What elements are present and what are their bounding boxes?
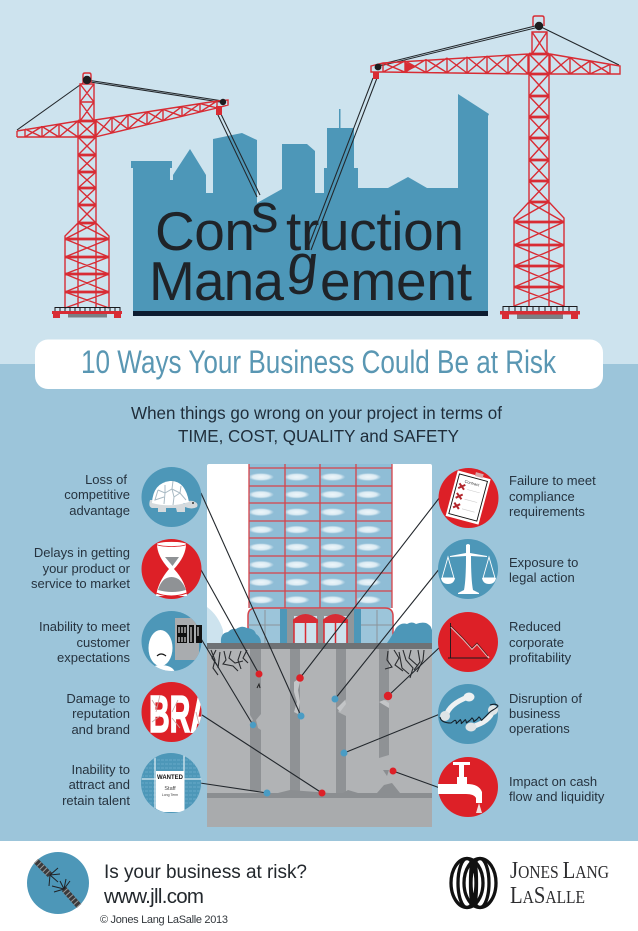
label: Impact on cash flow and liquidity: [509, 774, 605, 804]
right crane jib and mast lattice: [371, 16, 620, 306]
lobby doors: [294, 615, 347, 643]
icon: wanted poster: Long Term: [162, 793, 178, 797]
icon: disappointed face and building: [142, 611, 202, 672]
left jib pulley: [220, 99, 226, 105]
icon: falling profit chart: [438, 612, 498, 672]
label: Exposure to legal action: Exposure to: [509, 555, 578, 570]
icon: frayed rope: [27, 852, 89, 914]
left crane jib and mast lattice: [17, 73, 228, 308]
title: Construction Management: [149, 182, 472, 312]
right crane braces: [514, 54, 564, 287]
heading banner: [35, 340, 603, 389]
basement: [207, 798, 432, 827]
label: Delays in getting: Delays in getting: [34, 545, 130, 560]
title: Construction Management: g: [285, 233, 322, 295]
right crane base: [500, 306, 580, 319]
title: Construction Management: s: [251, 182, 278, 244]
icon: cracked brand letters: BRA: [149, 686, 211, 744]
logo: JLL rings: [451, 858, 496, 908]
icon: dripping tap: [438, 757, 498, 817]
left crane: [17, 73, 260, 318]
connector lines: [200, 493, 440, 793]
label: Reduced corporate profitability: corporate: [509, 635, 564, 650]
icon: disconnected telephone: [438, 684, 498, 744]
white sky behind building: [207, 464, 432, 644]
label: Reduced corporate profitability: profitability: [509, 650, 572, 665]
intro text: TIME, COST, QUALITY and SAFETY: [178, 426, 459, 446]
background sky: [0, 0, 638, 364]
icon: wanted poster: [141, 753, 202, 813]
label: Inability to meet customer expectations: expectations: [57, 650, 130, 665]
small crack mark: [257, 684, 260, 688]
title: Construction Management: Con: [155, 200, 255, 262]
icon: scales of justice: [438, 539, 498, 599]
left crane pulley: [83, 76, 91, 84]
label: Failure to meet compliance requirements: [509, 473, 596, 519]
label: Delays in getting: service to market: [31, 576, 130, 591]
title: Construction Management: truction: [286, 200, 464, 262]
phone cord: [440, 704, 498, 724]
left crane cables: [17, 80, 260, 197]
building panel: [207, 464, 432, 827]
icon: checklist: Contract: [464, 479, 481, 488]
left crane braces: [65, 121, 109, 292]
logo: wordmark: JONES LANG: [510, 858, 609, 884]
bush left: [221, 627, 261, 643]
floor slab: [207, 793, 432, 798]
label: Failure to meet compliance requirements: Failure to meet: [509, 473, 596, 488]
title: Construction Management: Mana: [149, 250, 284, 312]
label: Delays in getting: [31, 545, 131, 591]
label: Damage to reputation and brand: and brand: [71, 722, 130, 737]
right jib marker: [405, 62, 416, 72]
left crane hook block: [216, 106, 222, 115]
label: Impact on cash flow and liquidity: flow and liquidity: [509, 789, 605, 804]
label: Loss of competitive advantage: Loss of: [85, 472, 127, 487]
icon: hourglass: [142, 539, 202, 599]
label: Inability to attract and retain talent: retain talent: [62, 793, 130, 808]
right crane cables: [307, 25, 619, 250]
label: Exposure to legal action: legal action: [509, 570, 575, 585]
columns: [250, 649, 389, 793]
label: Disruption of business operations: Disruption of: [509, 691, 582, 706]
label: Disruption of business operations: operations: [509, 721, 570, 736]
bush right: [387, 622, 432, 643]
label: Damage to reputation and brand: Damage to: [66, 691, 130, 706]
intro text: [131, 403, 502, 446]
label: Damage to reputation and brand: reputation: [72, 706, 130, 721]
right crane hook block: [373, 72, 379, 79]
icon: turtle: [142, 467, 202, 527]
rubble: [278, 770, 400, 793]
left crane base: [52, 308, 122, 318]
label: Reduced corporate profitability: Reduced: [509, 619, 561, 634]
label: Delays in getting: your product or: [43, 561, 131, 576]
label: Disruption of business operations: [509, 691, 582, 736]
label: Disruption of business operations: business: [509, 706, 561, 721]
intro text: When things go wrong on your project in terms of: [131, 403, 502, 423]
tower red frame: [249, 464, 392, 608]
tree roots left: [211, 650, 248, 675]
label: Inability to meet customer expectations: customer: [77, 635, 131, 650]
label: Exposure to legal action: [509, 555, 578, 585]
poster text: WANTED: [157, 775, 184, 781]
label: Impact on cash flow and liquidity: Impact on cash: [509, 774, 597, 789]
title: Construction Management: ement: [320, 250, 472, 312]
right crane pulley: [535, 22, 543, 30]
pale background shape: [207, 607, 223, 643]
logo: wordmark: [510, 858, 609, 909]
label: Inability to meet customer expectations: Inability to meet: [39, 619, 130, 634]
label: Inability to attract and retain talent: attract and: [69, 777, 130, 792]
skyline base bar: [133, 311, 488, 316]
label: Inability to attract and retain talent: Inability to: [71, 762, 130, 777]
background lower panel: [0, 364, 638, 842]
label: Loss of competitive advantage: advantage: [69, 503, 130, 518]
city skyline: [131, 94, 489, 316]
label: Failure to meet compliance requirements: compliance: [509, 489, 575, 504]
label: Damage to reputation and brand: [66, 691, 130, 737]
icon: cracked brand letters: [142, 682, 202, 742]
ground strip: [207, 643, 432, 649]
tower windows: [249, 464, 392, 608]
icon: checklist: [438, 468, 498, 528]
right crane: [307, 16, 620, 319]
right jib pulley: [375, 64, 381, 70]
marker dots: [250, 670, 396, 796]
label: Loss of competitive advantage: [64, 472, 130, 518]
logo: wordmark: LASALLE: [510, 883, 585, 909]
label: Loss of competitive advantage: competitive: [64, 487, 130, 502]
icon: wanted poster: Staff: [164, 786, 176, 792]
concrete wall: [207, 649, 432, 827]
label: Reduced corporate profitability: [509, 619, 572, 665]
call to action: Is your business at risk?: [104, 862, 307, 883]
label: Inability to meet customer expectations: [39, 619, 131, 665]
website: www.jll.com: [103, 885, 204, 908]
column damage: [294, 678, 389, 714]
copyright: © Jones Lang LaSalle 2013: [100, 914, 228, 926]
label: Failure to meet compliance requirements: requirements: [509, 504, 585, 519]
tree roots right: [385, 650, 424, 678]
label: Inability to attract and retain talent: [62, 762, 130, 808]
footer: [0, 841, 638, 931]
lobby: [248, 608, 393, 643]
